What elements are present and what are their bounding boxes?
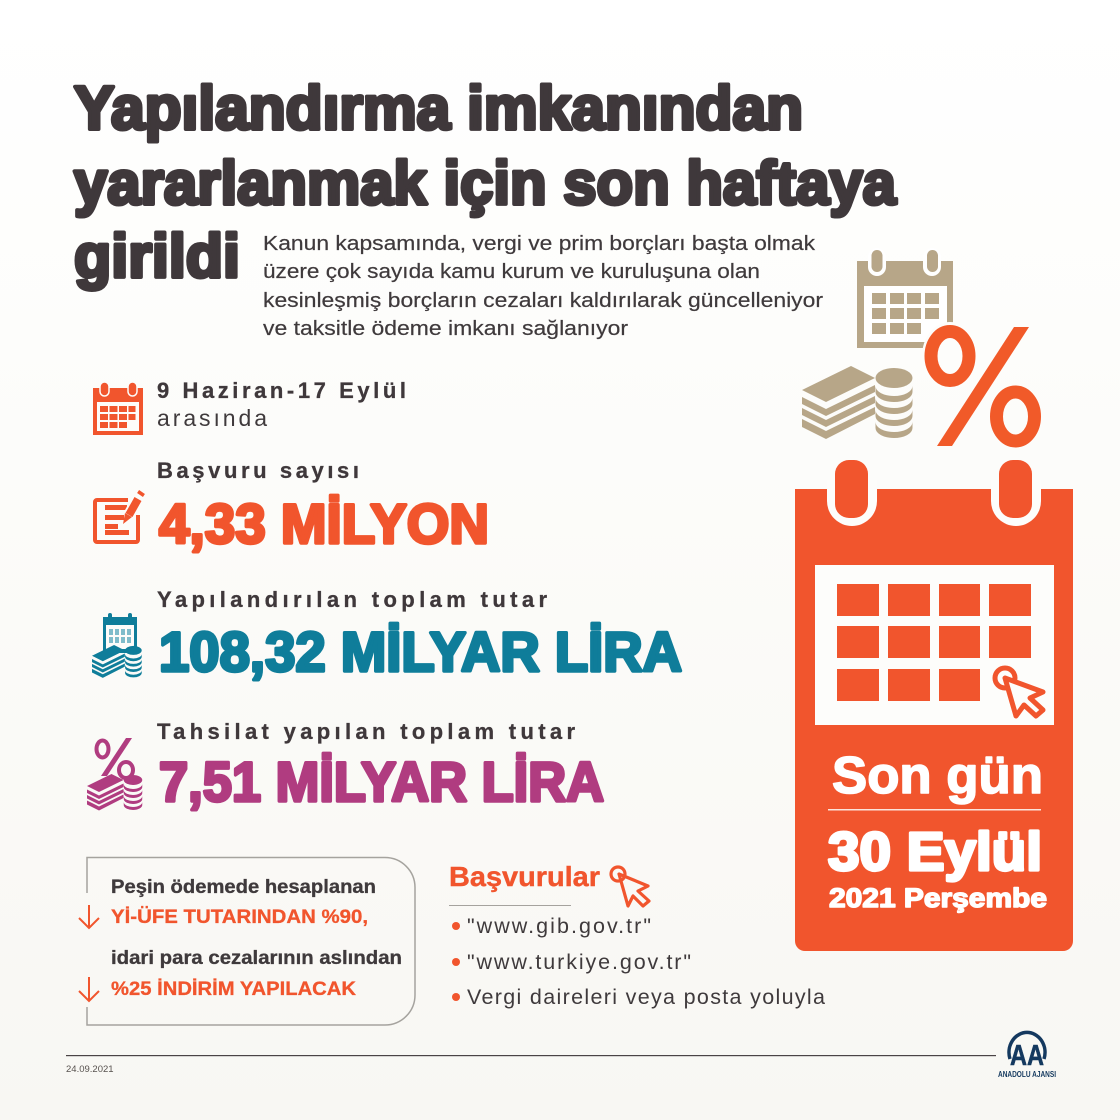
- divider: [828, 809, 1041, 810]
- logo: Anadolu Ajansi: ANADOLU AJANSI: [998, 1070, 1056, 1079]
- value: collected total: 7,51 MİLYAR LİRA: [159, 750, 604, 813]
- calendar date grid: [837, 584, 1031, 701]
- arrow: down: [79, 905, 99, 928]
- application channels list: "www.turkiye.gov.tr": [467, 950, 691, 974]
- icon: purple percent and money: [87, 738, 142, 810]
- value: restructured total: 108,32 MİLYAR LİRA: [159, 620, 682, 683]
- intro text: [263, 233, 823, 340]
- date range: [157, 378, 406, 431]
- icon: percent sign: [922, 322, 1034, 446]
- label: restructured total: Yapılandırılan toplam tutar: [157, 587, 547, 612]
- label: applications: Başvuru sayısı: [157, 458, 359, 483]
- date range: arasında: [157, 405, 267, 431]
- label: collected total: Tahsilat yapılan toplam tutar: [157, 719, 575, 744]
- discount text: idari para cezalarının aslından: [111, 948, 402, 969]
- discount text: Yİ-ÜFE TUTARINDAN %90,: [111, 907, 368, 928]
- icon: tan calendar: [857, 248, 953, 348]
- intro text: Kanun kapsamında, vergi ve prim borçları başta olmak: [263, 233, 816, 255]
- title: yararlanmak için son haftaya: [74, 149, 897, 217]
- title: Yapılandırma imkanından: [74, 74, 803, 142]
- deadline date: 30 Eylül: [828, 822, 1042, 882]
- deadline label: Son gün: [832, 747, 1043, 805]
- icon: cursor small: [611, 867, 649, 906]
- application channels list: "www.gib.gov.tr": [467, 914, 651, 938]
- date: 24.09.2021: [66, 1064, 114, 1075]
- icon: orange calendar: [93, 382, 143, 435]
- discount text: Peşin ödemede hesaplanan: [111, 877, 376, 898]
- heading: applications: Başvurular: [449, 861, 600, 892]
- intro text: kesinleşmiş borçların cezaları kaldırılarak güncelleniyor: [263, 290, 823, 312]
- footer rule: [66, 1055, 996, 1056]
- deadline year and weekday: 2021 Perşembe: [829, 883, 1047, 913]
- value: applications: 4,33 MİLYON: [159, 492, 489, 555]
- icon: cursor: [995, 668, 1043, 716]
- intro text: üzere çok sayıda kamu kurum ve kuruluşuna olan: [263, 261, 760, 283]
- date range: 9 Haziran-17 Eylül: [157, 378, 406, 403]
- icon: form and pencil: [95, 492, 142, 542]
- divider under heading: [449, 905, 571, 906]
- title: [74, 74, 897, 290]
- icon: tan money stack: [802, 366, 912, 439]
- calendar face: [815, 565, 1054, 725]
- discount text: [111, 877, 402, 1000]
- intro text: ve taksitle ödeme imkanı sağlanıyor: [263, 318, 628, 340]
- panel: discounts: [79, 858, 415, 1025]
- arrow: down: [79, 977, 99, 1001]
- logo: Anadolu Ajansi: [998, 1032, 1056, 1079]
- discount text: %25 İNDİRİM YAPILACAK: [111, 979, 356, 1000]
- logo: Anadolu Ajansi: AA: [1010, 1040, 1044, 1072]
- application channels list: Vergi daireleri veya posta yoluyla: [467, 985, 825, 1009]
- icon: teal calendar and money: [92, 613, 142, 678]
- application channels list: [452, 914, 825, 1009]
- calendar ring left: [827, 460, 877, 526]
- panel: big calendar: [795, 460, 1073, 951]
- title: girildi: [74, 222, 240, 290]
- calendar ring right: [991, 460, 1041, 526]
